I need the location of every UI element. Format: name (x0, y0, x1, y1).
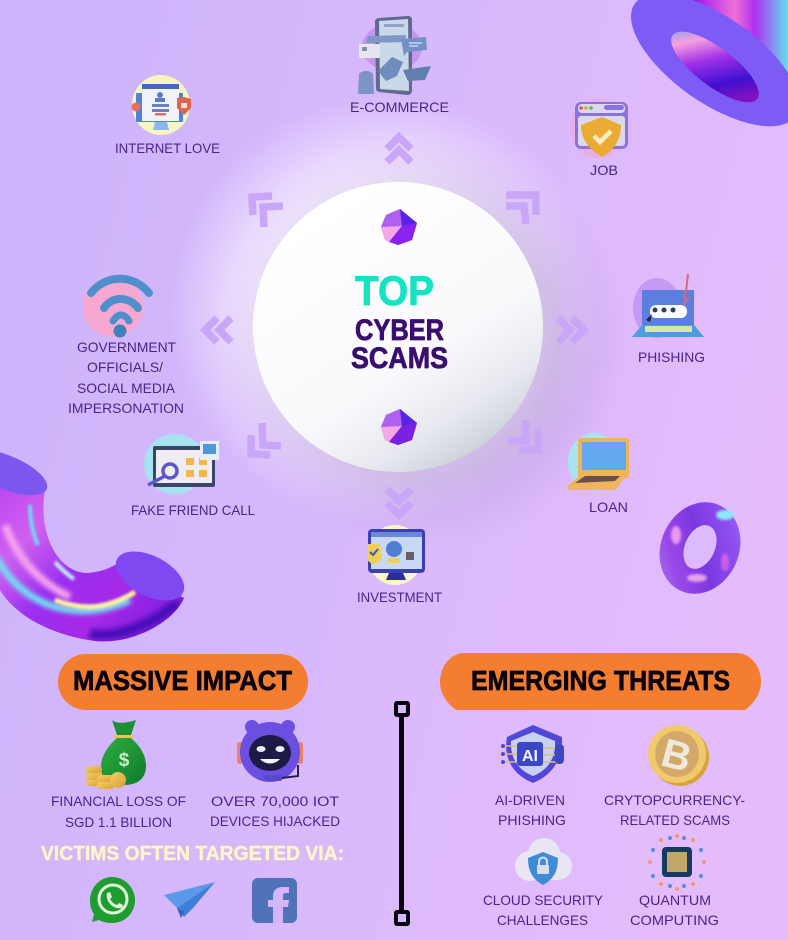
stat: AI phishing (495, 792, 566, 828)
heading pill (58, 654, 308, 710)
panel: massive impact (41, 654, 344, 923)
decorative 3D ring: top right (610, 0, 788, 151)
label (68, 339, 184, 416)
stat: iot devices: DEVICES HIJACKED (210, 813, 340, 829)
item: investment (357, 525, 442, 605)
gem: bottom (381, 409, 417, 445)
icon: paper plane (164, 882, 215, 918)
stat: quantum computing (630, 892, 719, 928)
icon: AI shield: AI (522, 748, 538, 765)
stat: crypto scams: RELATED SCAMS (620, 812, 730, 828)
arrow: up-right (506, 195, 536, 224)
title: SCAMS (351, 342, 448, 375)
gem: top (381, 209, 417, 245)
icon: money bag (86, 720, 146, 789)
arrow: up-left (252, 196, 283, 227)
stat: financial loss (51, 793, 186, 830)
stat: cloud security: CLOUD SECURITY (483, 892, 604, 908)
stat: AI phishing: PHISHING (498, 812, 566, 828)
icon: wifi (83, 277, 149, 338)
arrow: down-left (251, 423, 281, 455)
icon: AI shield (501, 725, 564, 783)
item: fake friend call (131, 434, 255, 518)
icon: cloud lock (515, 838, 572, 885)
icon: whatsapp (90, 877, 135, 923)
icon: robot (237, 720, 303, 782)
label: GOVERNMENT (77, 339, 176, 355)
stat: quantum computing: COMPUTING (630, 912, 719, 928)
decorative 3D macaroni tube: left (0, 439, 192, 641)
stat: crypto scams (604, 792, 745, 828)
icon: bitcoin (638, 715, 719, 796)
stat: financial loss: FINANCIAL LOSS OF (51, 793, 186, 809)
label: OFFICIALS/ (87, 359, 163, 375)
title: CYBER (355, 314, 444, 347)
stat: iot devices: OVER 70,000 IOT (211, 794, 339, 809)
heading pill (440, 653, 761, 710)
item: loan (567, 433, 629, 515)
icon: secure monitor (367, 525, 425, 585)
icon: shield window (570, 98, 628, 158)
label: INTERNET LOVE (115, 140, 220, 156)
heading pill: EMERGING THREATS (471, 665, 730, 696)
decorative 3D torus: right (645, 489, 755, 607)
heading pill: MASSIVE IMPACT (73, 665, 292, 696)
arrow: up (387, 137, 411, 162)
icon: quantum chip (648, 834, 706, 891)
label: INVESTMENT (357, 589, 442, 605)
stat: financial loss: SGD 1.1 BILLION (65, 814, 172, 830)
arrow: left (205, 318, 231, 342)
stat: AI phishing: AI-DRIVEN (495, 792, 565, 808)
label: LOAN (589, 499, 628, 515)
arrow: right (558, 318, 584, 342)
label: SOCIAL MEDIA (77, 380, 176, 396)
icon: bitcoin: B (657, 731, 696, 781)
stat: cloud security (483, 892, 604, 928)
title: TOP (355, 267, 434, 314)
label: FAKE FRIEND CALL (131, 502, 255, 518)
item: phishing (632, 274, 705, 365)
item: government officials (68, 277, 184, 416)
divider (396, 703, 408, 924)
stat: crypto scams: CRYTOPCURRENCY- (604, 792, 745, 808)
icon: login monitor (132, 75, 191, 135)
arrow: down (387, 489, 411, 515)
label: IMPERSONATION (68, 400, 184, 416)
label: E-COMMERCE (350, 99, 449, 115)
icon: shopping phone (358, 16, 431, 95)
item: job (570, 98, 628, 178)
subheading: VICTIMS OFTEN TARGETED VIA: (41, 843, 344, 865)
icon: laptop (567, 433, 629, 491)
label: PHISHING (638, 349, 705, 365)
centre glow (170, 95, 630, 550)
icon: money bag: $ (119, 750, 130, 771)
arrow: down-right (508, 420, 538, 450)
centre circle (253, 182, 543, 472)
icon: laptop and hook (632, 274, 704, 338)
stat: iot devices (210, 794, 340, 829)
icon: facebook (252, 878, 297, 923)
stat: cloud security: CHALLENGES (497, 912, 588, 928)
panel: emerging threats (440, 653, 761, 928)
stat: quantum computing: QUANTUM (639, 892, 711, 908)
title (351, 267, 448, 375)
label: JOB (590, 162, 618, 178)
item: internet love (115, 75, 220, 156)
icon: folders and magnifier (144, 434, 219, 494)
item: e-commerce (350, 16, 449, 115)
